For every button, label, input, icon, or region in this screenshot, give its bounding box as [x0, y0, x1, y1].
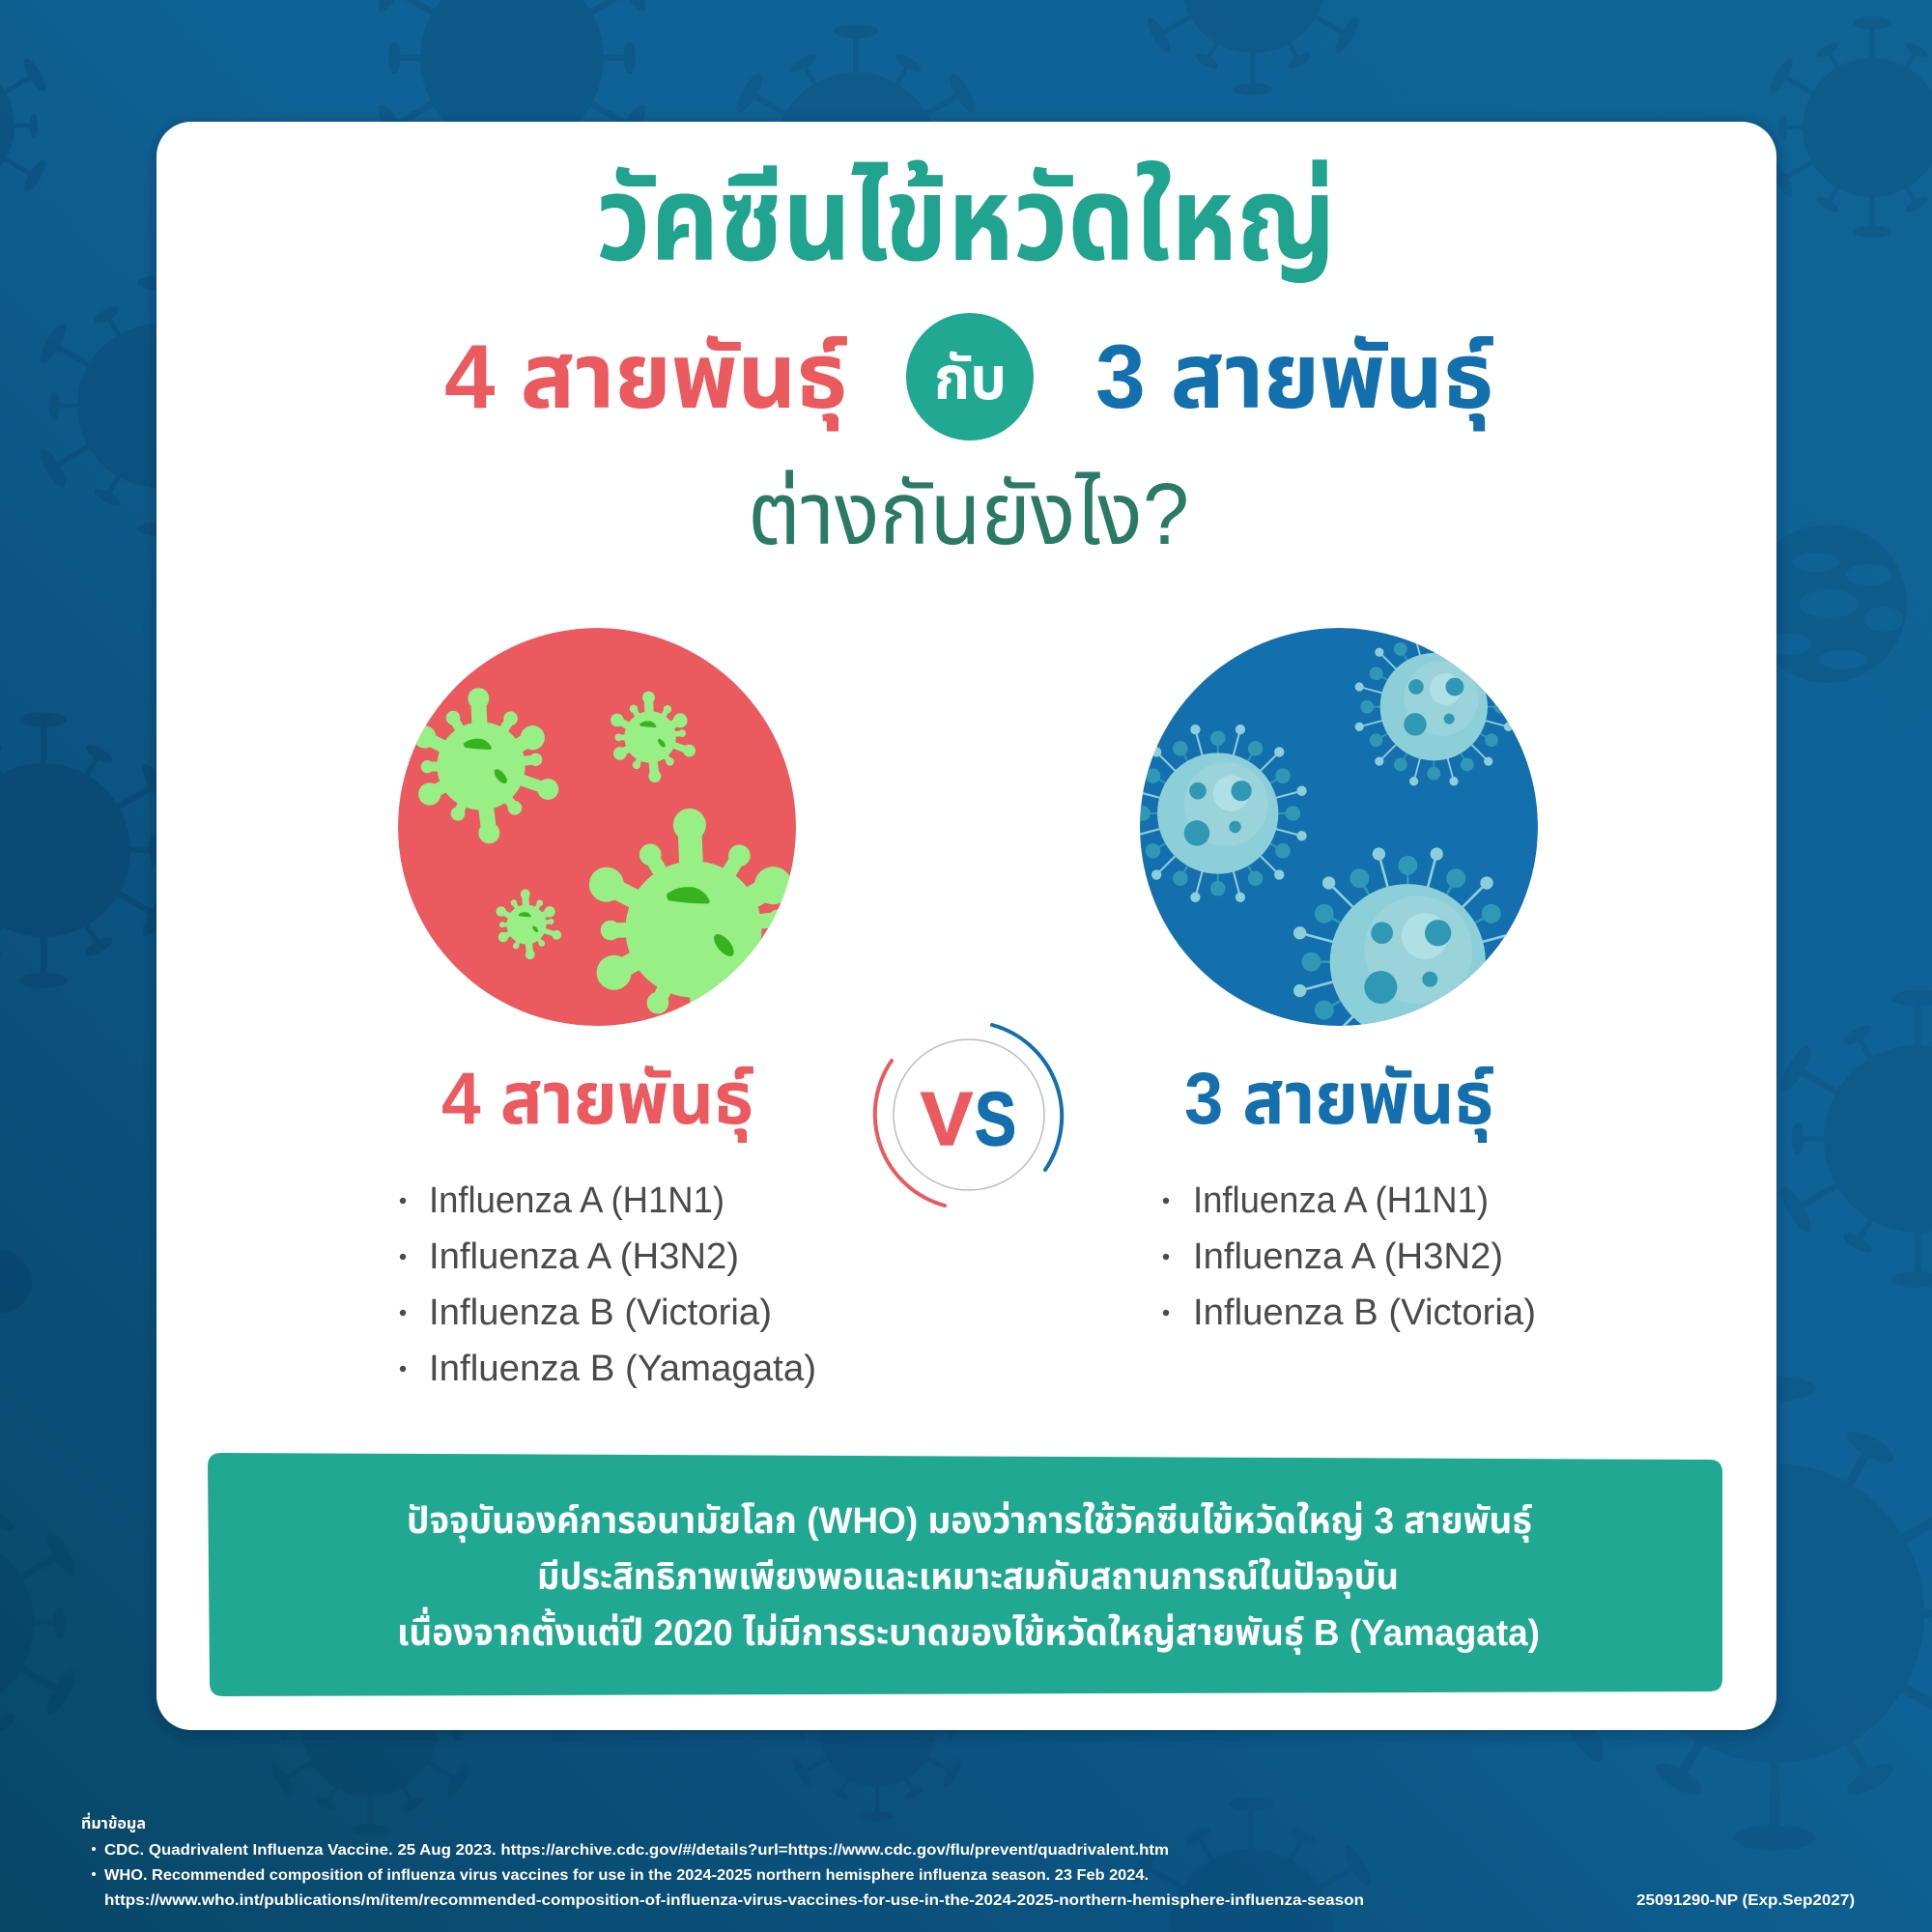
illustration: red circle with green viruses [398, 628, 813, 1049]
callout: WHO note: เนื่องจากตั้งแต่ปี 2020 ไม่มีการระบาดของไข้หวัดใหญ่สายพันธุ์ B (Yamagata) [397, 1606, 1540, 1655]
list: 4 strains: Influenza B (Victoria) [429, 1293, 772, 1333]
icon: VS badge: V [921, 1076, 973, 1161]
title: วัคซีนไข้หวัดใหญ่ [596, 154, 1336, 285]
footer: sources: CDC. Quadrivalent Influenza Vaccine. 25 Aug 2023. https://archive.cdc.gov/#/details?url=https://www.cdc.gov/flu/prevent/quadrivalent.htm [104, 1842, 1169, 1859]
list: 3 strains: Influenza A (H1N1) [1193, 1180, 1489, 1221]
list: 3 strains [1163, 1180, 1536, 1333]
icon: VS badge: S [975, 1076, 1016, 1161]
footer: document code: 25091290-NP (Exp.Sep2027) [1636, 1892, 1855, 1909]
footer: sources [81, 1812, 1364, 1909]
footer: sources: ที่มาข้อมูล [81, 1812, 146, 1833]
callout: WHO note [208, 1453, 1722, 1696]
list: 4 strains: Influenza A (H1N1) [429, 1180, 724, 1221]
list: 3 strains: Influenza A (H3N2) [1193, 1236, 1503, 1277]
heading: 4 strains: 4 สายพันธุ์ [444, 326, 848, 432]
callout: WHO note: ปัจจุบันองค์การอนามัยโลก (WHO) มองว่าการใช้วัคซีนไข้หวัดใหญ่ 3 สายพันธุ์ [407, 1501, 1533, 1543]
footer: sources: WHO. Recommended composition of influenza virus vaccines for use in the 2024-2025 northern hemisphere influenza season. 23 Feb 2024. [104, 1867, 1149, 1884]
list: 4 strains [400, 1180, 816, 1389]
panel: white card [156, 122, 1776, 1730]
heading: 4 strains column: 4 สายพันธุ์ [441, 1058, 753, 1143]
list: 3 strains: Influenza B (Victoria) [1193, 1293, 1536, 1333]
callout: WHO note: มีประสิทธิภาพเพียงพอและเหมาะสมกับสถานการณ์ในปัจจุบัน [537, 1557, 1399, 1599]
badge: with: กับ [934, 346, 1007, 412]
subtitle: ต่างกันยังไง? [748, 467, 1189, 563]
list: 4 strains: Influenza B (Yamagata) [429, 1349, 816, 1389]
icon: VS badge [875, 1025, 1062, 1206]
list: 4 strains: Influenza A (H3N2) [429, 1236, 739, 1277]
badge: with [906, 313, 1034, 440]
heading: 3 strains column: 3 สายพันธุ์ [1184, 1058, 1493, 1143]
heading: 3 strains: 3 สายพันธุ์ [1095, 326, 1494, 432]
illustration: blue circle with teal viruses [1140, 628, 1538, 1026]
footer: sources: https://www.who.int/publications/m/item/recommended-composition-of-influenza-virus-vaccines-for-use-in-the-2024-2025-northern-hemisphere-influenza-season [104, 1892, 1364, 1909]
